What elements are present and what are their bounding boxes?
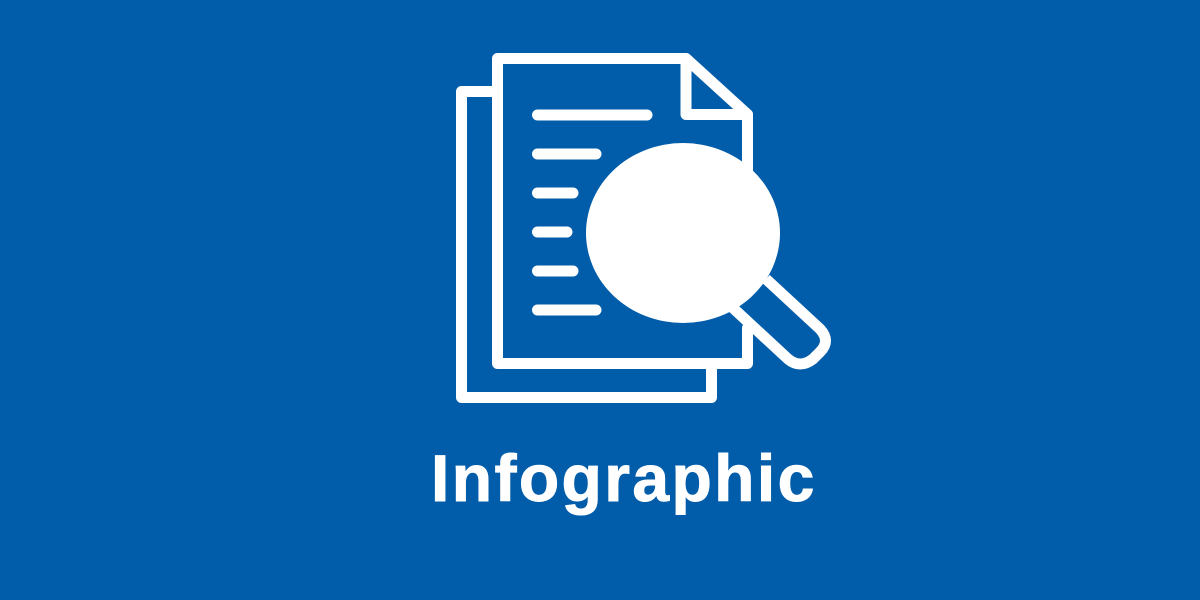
icon: back page [462, 92, 712, 398]
icon: magnifier handle [733, 279, 826, 364]
icon: text lines [538, 115, 647, 310]
icon: magnifier lens [586, 143, 780, 323]
icon: front page [498, 58, 748, 364]
title: Infographic [431, 441, 817, 515]
icon: page fold [686, 58, 748, 114]
icon: documents with magnifying glass [462, 58, 826, 398]
